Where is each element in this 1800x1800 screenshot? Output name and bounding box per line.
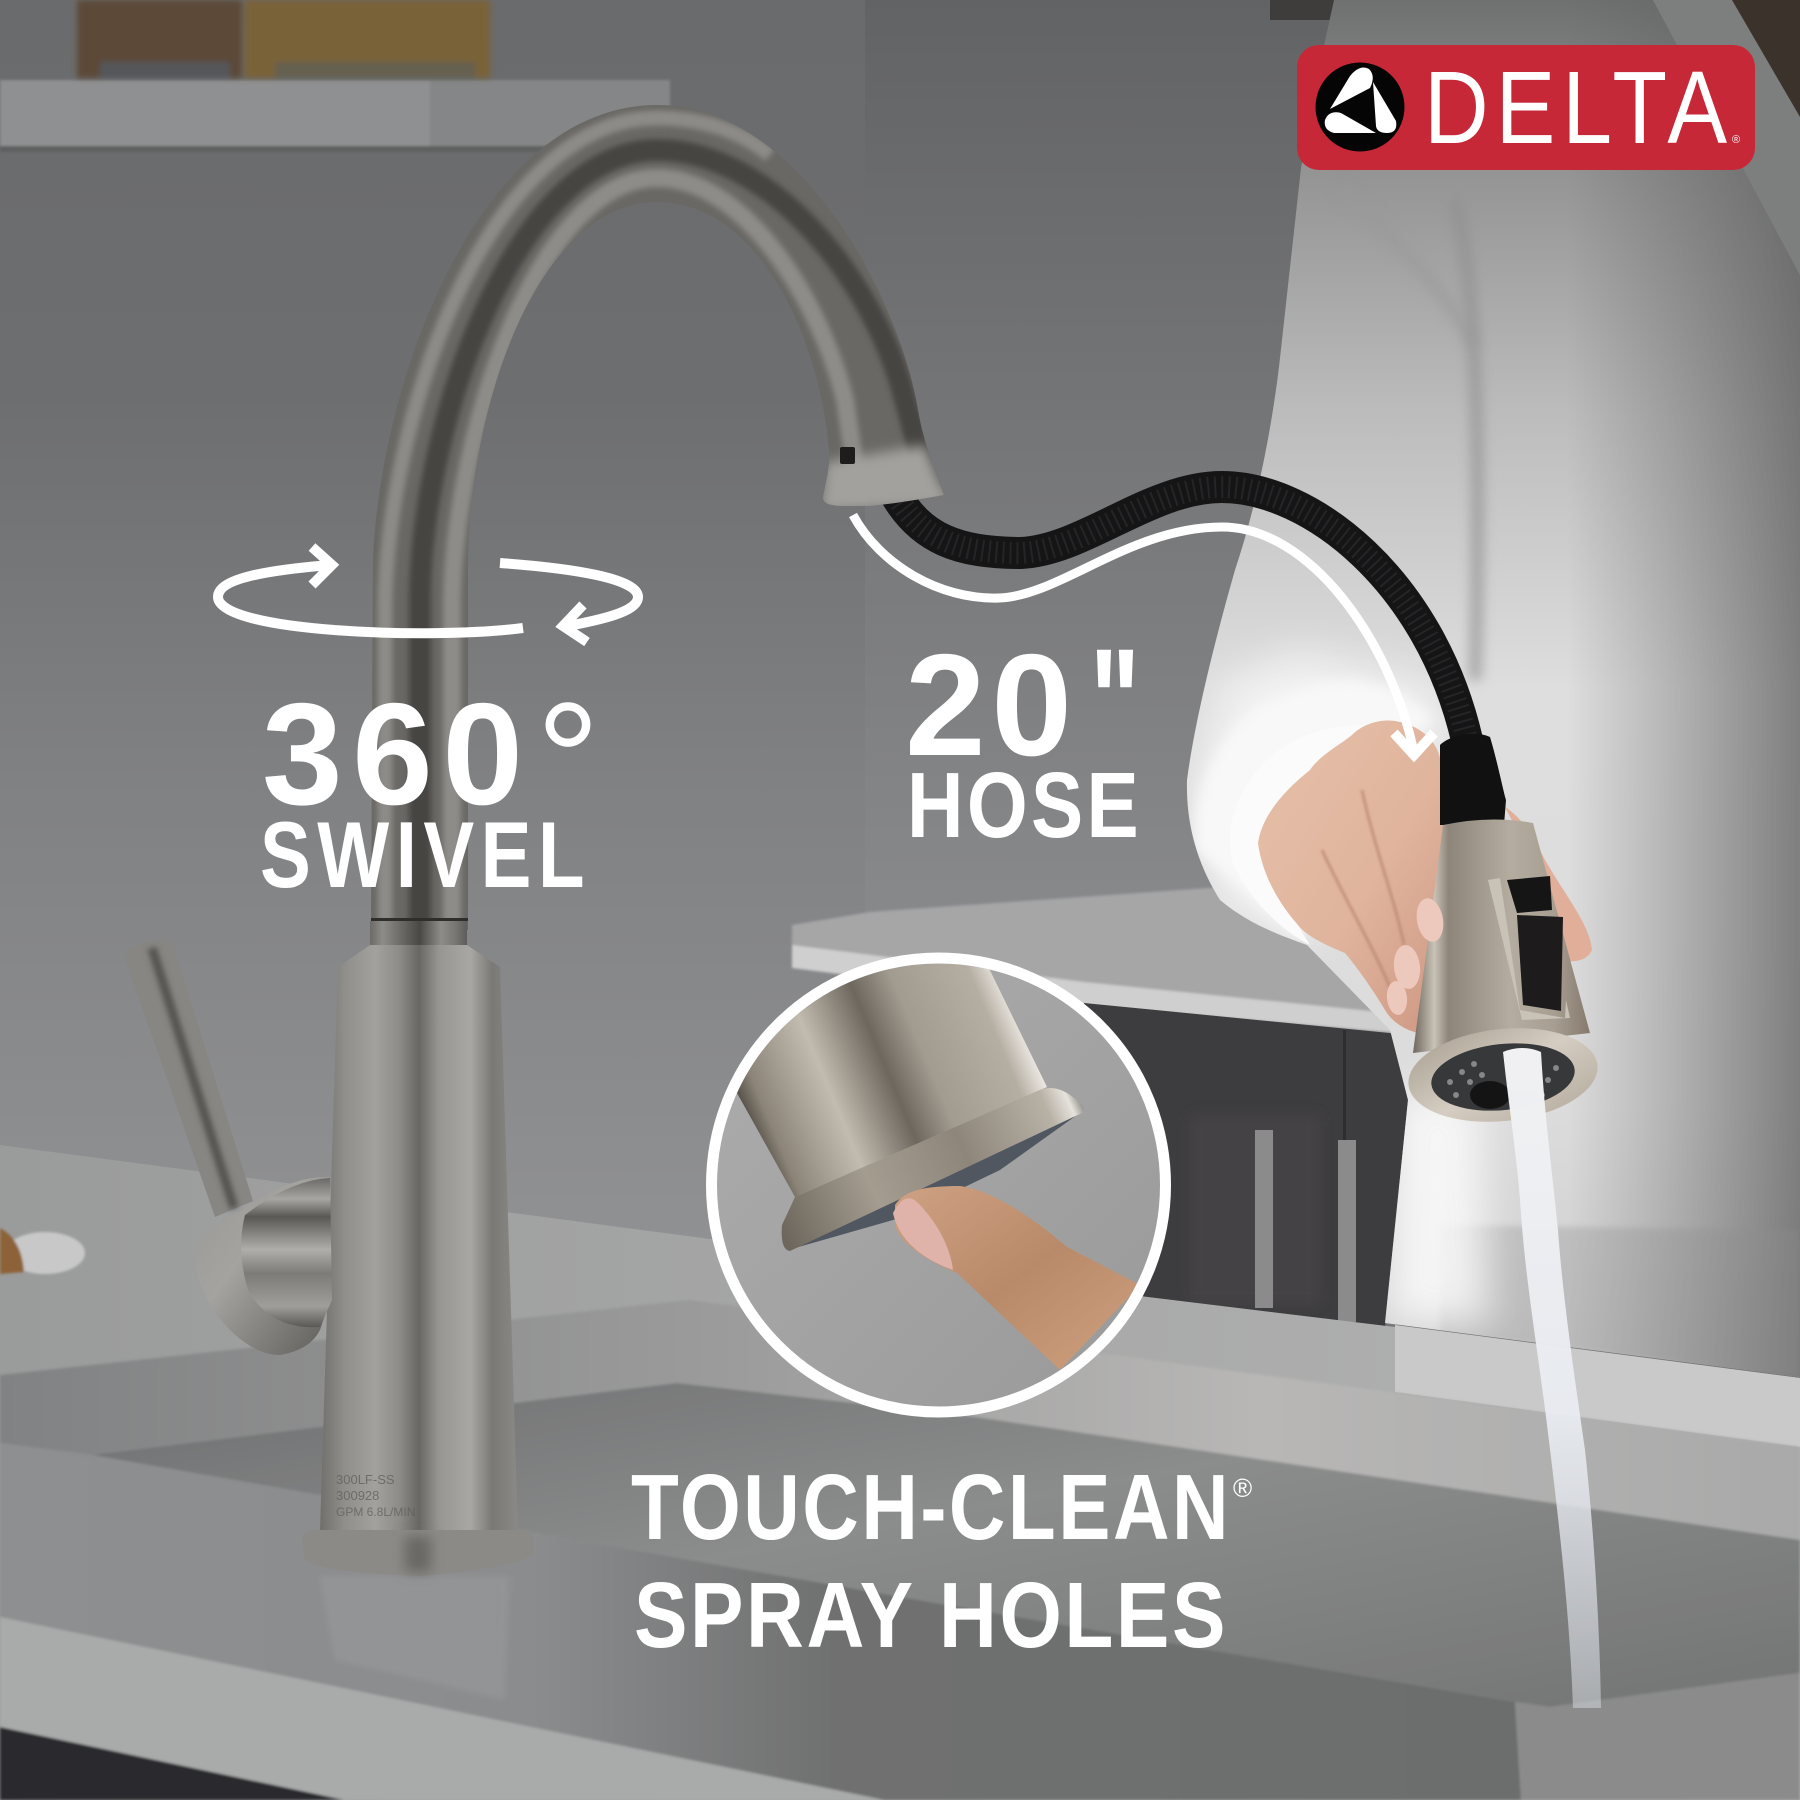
faucet reflection <box>320 1576 510 1700</box>
sweater right shading <box>1588 32 1800 1377</box>
front right counter <box>1515 1673 1800 1800</box>
dark cabinet <box>1084 1003 1420 1328</box>
sprayer body <box>1413 819 1590 1053</box>
spray face <box>1428 1037 1578 1117</box>
hose length arrow <box>853 515 1434 755</box>
sink <box>0 1300 1800 1800</box>
faucet spout <box>371 105 950 930</box>
engraved marks: 300LF-SS <box>336 1472 395 1487</box>
Delta logo badge <box>1297 45 1755 170</box>
shoulder skin <box>1732 0 1800 117</box>
registered mark: ® <box>1732 134 1740 146</box>
dark wall fixture <box>1270 0 1334 20</box>
sleeve seam <box>1455 200 1478 680</box>
ribbed hem shade <box>1440 1225 1690 1360</box>
spray head closeup <box>737 964 1084 1251</box>
jars on shelf <box>77 0 490 78</box>
water stream <box>1503 1048 1601 1708</box>
spray holes <box>1447 1061 1559 1098</box>
right wall <box>865 0 1465 1100</box>
lever dark line <box>152 948 234 1208</box>
spray head ring <box>1404 1019 1602 1131</box>
20 inch hose label <box>905 617 1142 857</box>
touch-clean spray holes label: SPRAY HOLES <box>634 1563 1228 1667</box>
20 inch hose label: 20 <box>905 624 1072 786</box>
touch-clean spray holes label: ® <box>1233 1473 1252 1503</box>
button frame <box>1488 878 1570 1020</box>
handle hub cylinder <box>241 1178 332 1327</box>
360 degree swivel label <box>260 669 600 907</box>
foot shading <box>405 1536 431 1572</box>
person: white sweater <box>1187 0 1800 1447</box>
faucet neck <box>370 921 467 951</box>
sleeve highlight <box>1190 650 1440 945</box>
lower white patch <box>1385 1090 1490 1325</box>
handle hub cap <box>195 1177 330 1355</box>
sprayer neck connector <box>1440 734 1506 825</box>
cabinet below counter <box>0 1727 344 1800</box>
left wall <box>0 0 865 1300</box>
20 inch hose label: HOSE <box>907 753 1142 857</box>
engraved marks <box>336 1472 415 1519</box>
front counter <box>0 1443 1521 1800</box>
plate at left edge <box>0 1228 85 1274</box>
pause button <box>1507 876 1552 913</box>
spout sensor <box>840 447 855 464</box>
collar <box>371 918 468 921</box>
sink rim <box>0 1300 1800 1540</box>
shelf <box>0 80 670 152</box>
finger creases <box>1322 790 1404 992</box>
20 inch hose label: " <box>1090 617 1140 785</box>
360 degree swivel label: SWIVEL <box>260 802 591 907</box>
back counter <box>792 885 1420 1035</box>
left countertop <box>0 1145 1800 1800</box>
engraved marks: 300928 <box>336 1488 379 1503</box>
360 degree swivel label: 360 <box>262 673 523 835</box>
hand <box>1258 721 1453 1033</box>
handle lever <box>125 940 253 1217</box>
swivel arrows icon <box>218 547 638 642</box>
touch-clean spray holes label: TOUCH-CLEAN <box>631 1455 1231 1559</box>
front lip <box>0 1617 884 1800</box>
basin <box>92 1383 1800 1707</box>
engraved marks: GPM 6.8L/MIN <box>336 1505 415 1519</box>
faucet foot <box>302 1530 533 1576</box>
360 degree swivel label: ° <box>536 669 600 848</box>
touch-clean spray holes label <box>631 1455 1252 1667</box>
thumb <box>1505 807 1592 961</box>
fingertip closeup <box>893 1186 1140 1370</box>
faucet body <box>320 945 518 1530</box>
sprayer and hand <box>1230 721 1602 1131</box>
cuff <box>1230 725 1365 945</box>
spray toggle button <box>1517 915 1563 1011</box>
center nozzle <box>1470 1081 1510 1109</box>
faucet <box>125 105 950 1576</box>
sweater collar <box>1653 0 1800 275</box>
folds <box>1452 311 1458 324</box>
fingernails <box>1385 896 1447 1016</box>
logo wordmark: DELTA <box>1424 50 1734 165</box>
sweater reflection on counter <box>1395 1325 1800 1447</box>
inset circle: touch-clean spray holes <box>700 950 1166 1412</box>
pull-down hose <box>893 487 1467 740</box>
logo mark <box>1316 62 1404 152</box>
fingernail <box>893 1198 953 1270</box>
